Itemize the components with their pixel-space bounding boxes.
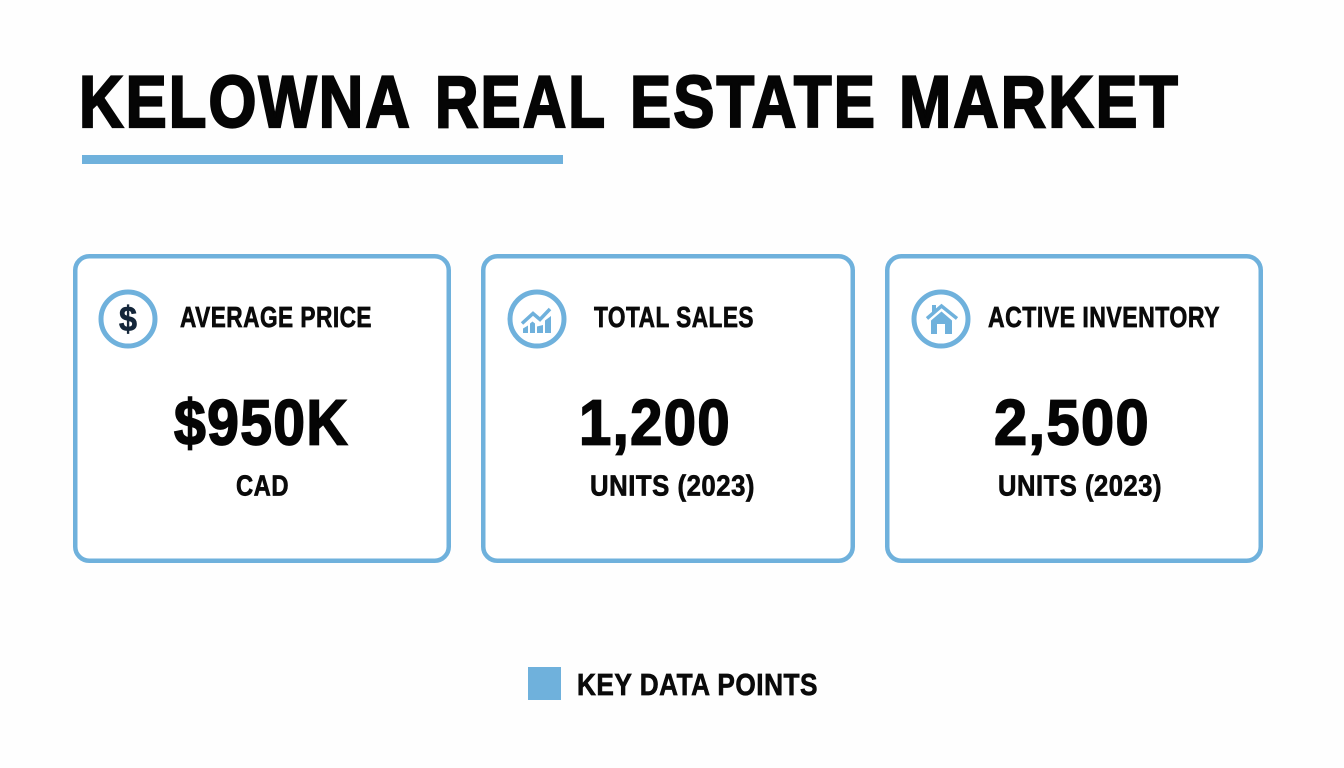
- panel: active inventory: [887, 256, 1261, 561]
- value: total sales: 1,200: [579, 386, 731, 458]
- legend label: KEY DATA POINTS: [577, 667, 818, 702]
- unit: active inventory: UNITS (2023): [998, 470, 1162, 502]
- value: active inventory: 2,500: [994, 386, 1150, 458]
- icon: house: [914, 292, 968, 346]
- icon: dollar sign: [101, 292, 155, 346]
- icon: growth chart: [510, 292, 564, 346]
- unit: total sales: UNITS (2023): [590, 470, 755, 502]
- title: [79, 62, 1180, 143]
- panel: total sales: [483, 256, 853, 561]
- label: total sales: TOTAL SALES: [594, 302, 754, 334]
- panel: average price: [75, 256, 449, 561]
- icon: dollar sign: $: [119, 300, 137, 339]
- unit: average price: CAD: [236, 470, 289, 502]
- label: active inventory: ACTIVE INVENTORY: [988, 302, 1220, 334]
- label: average price: AVERAGE PRICE: [180, 302, 372, 334]
- title: ESTATE: [630, 62, 877, 143]
- legend: [528, 667, 818, 702]
- title underline: [82, 155, 563, 164]
- title: KELOWNA: [79, 62, 412, 143]
- title: MARKET: [899, 62, 1180, 143]
- value: average price: $950K: [174, 386, 349, 458]
- title: REAL: [435, 62, 607, 143]
- legend swatch: [528, 667, 561, 700]
